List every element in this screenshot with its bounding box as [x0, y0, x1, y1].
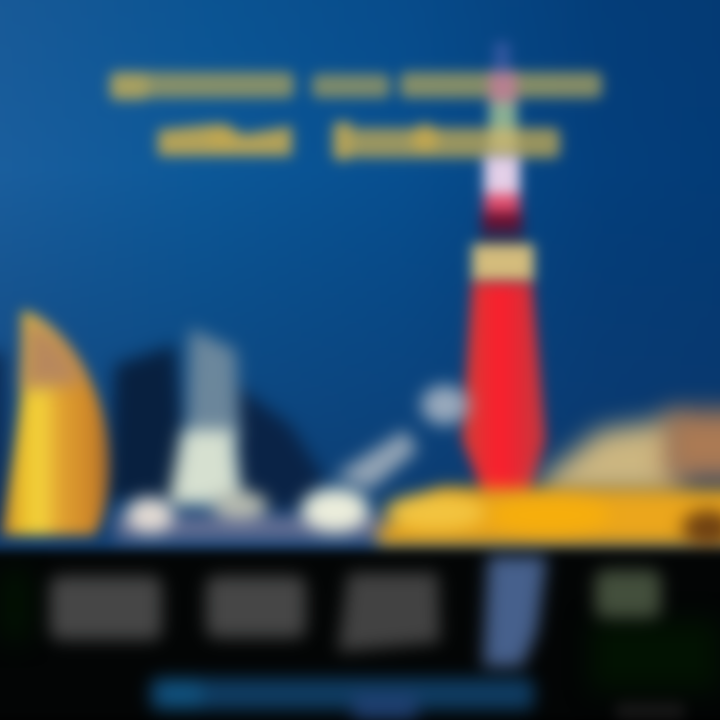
illegible info card 3 — [338, 573, 440, 652]
white statue tower — [168, 328, 242, 505]
night sky background — [0, 0, 720, 560]
golden sail building — [2, 310, 110, 535]
blue tower reflection — [483, 556, 547, 667]
dark lower band — [0, 550, 720, 720]
tower red shaft — [462, 282, 546, 496]
faint corner mark — [615, 702, 685, 720]
white bridge and small building lights — [115, 385, 469, 540]
illegible blue footer text — [150, 678, 534, 720]
tower spire lights — [494, 42, 510, 76]
title: illegible blurred heading, first line — [110, 72, 602, 100]
illegible info card 2 — [206, 576, 306, 638]
orange illuminated waterfront on right — [378, 410, 720, 546]
illegible info card 4 — [595, 570, 661, 618]
red and white tower — [462, 42, 546, 496]
dark mountain silhouette — [0, 345, 325, 530]
title: illegible blurred heading, second line — [158, 122, 560, 160]
illegible info card 1 — [50, 576, 162, 640]
